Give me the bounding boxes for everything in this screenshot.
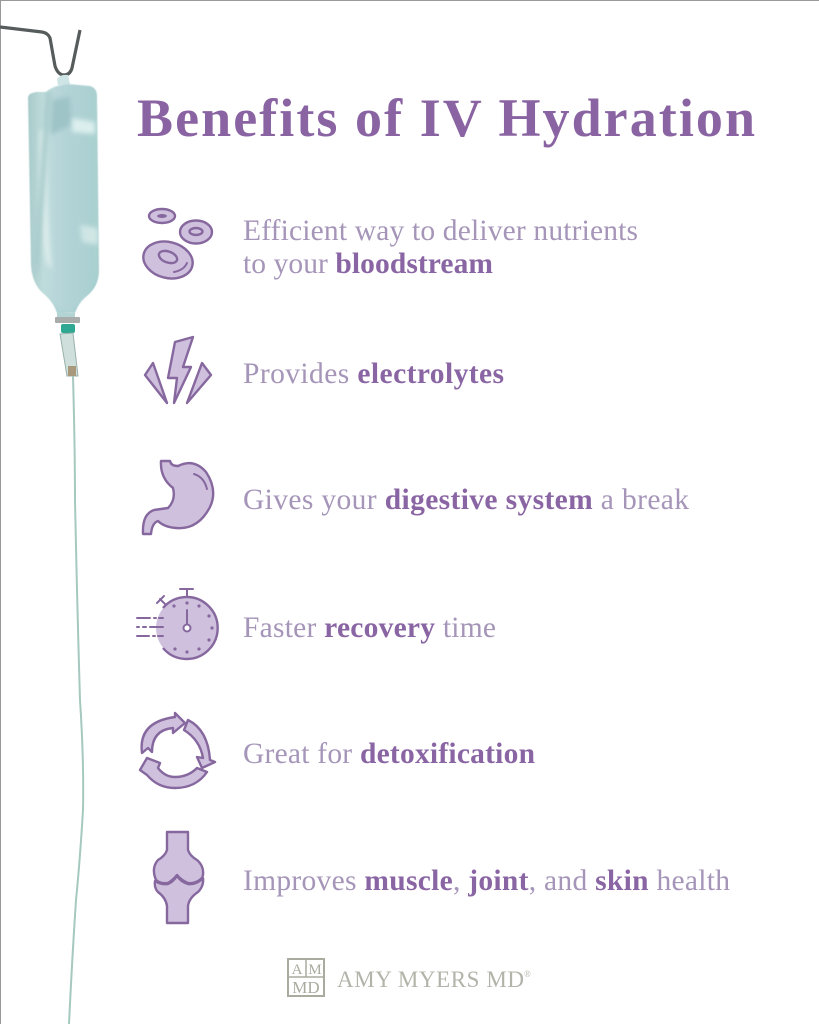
benefit 2: electrolytes [145, 337, 504, 403]
text: digestive: Gives your digestive system a break [243, 484, 689, 516]
icon: knee joint [154, 832, 203, 923]
iv bag [28, 75, 99, 376]
text: recovery: Faster recovery time [243, 612, 496, 644]
logo mark: M [308, 962, 322, 978]
tube [69, 376, 83, 1024]
iv drip [0, 27, 99, 1024]
benefit 5: detoxification [140, 713, 535, 788]
benefit 6: joint [154, 832, 730, 923]
icon: lightning bolt [145, 337, 211, 403]
logo: ® [524, 969, 531, 979]
logo wordmark: AMY MYERS MD [337, 967, 524, 992]
logo [288, 959, 531, 997]
icon: blood cells [139, 209, 212, 284]
benefit 3: digestive [143, 461, 689, 534]
benefit 1: nutrients [139, 209, 638, 284]
text: joint: Improves muscle, joint, and skin health [243, 865, 730, 897]
logo mark: MD [292, 978, 320, 997]
logo mark [288, 959, 324, 997]
icon: stomach [143, 461, 213, 534]
title: Benefits of IV Hydration [137, 88, 755, 148]
icon: recycle arrows [140, 713, 215, 788]
text: electrolytes: Provides electrolytes [243, 358, 504, 390]
icon: stopwatch [137, 589, 218, 659]
benefit 1: nutrients: to your bloodstream [243, 248, 493, 280]
text: nutrients: Efficient way to deliver nutrients [243, 215, 638, 247]
hook [0, 27, 80, 75]
text: detoxification: Great for detoxification [243, 738, 535, 770]
logo mark: A [292, 962, 303, 978]
benefit 4: recovery [137, 589, 496, 659]
